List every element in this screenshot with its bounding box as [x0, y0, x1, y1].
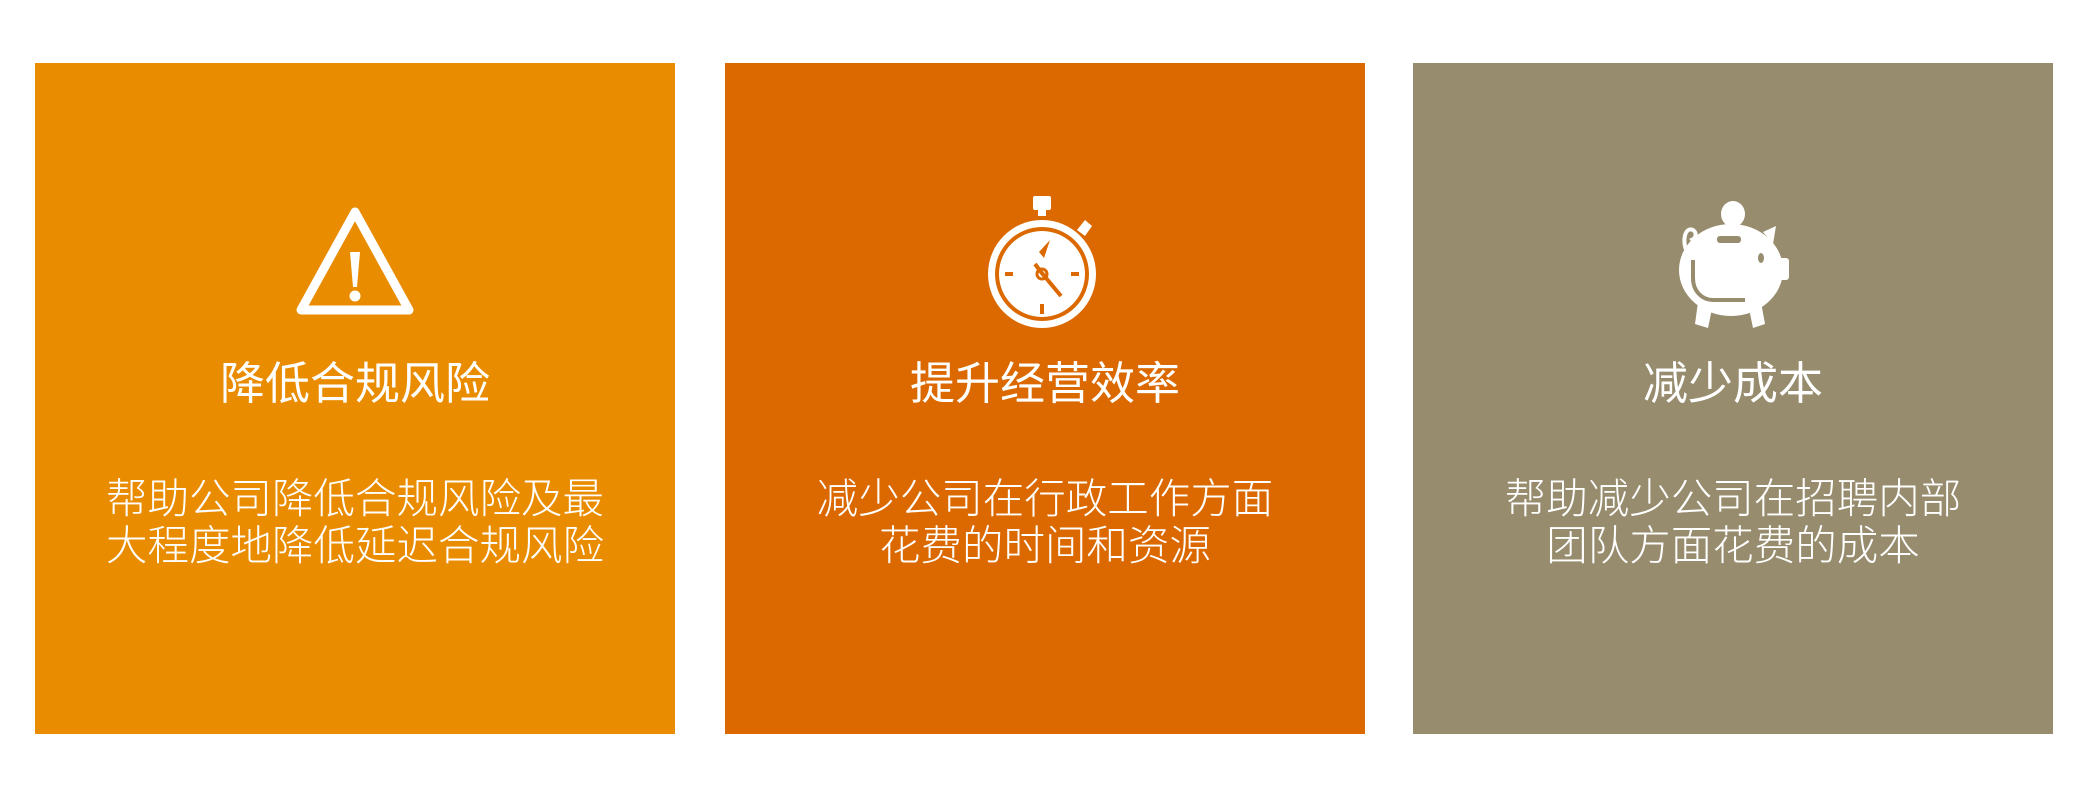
heading: 减少成本	[1643, 358, 1823, 409]
panel: improve efficiency	[725, 63, 1365, 734]
panel: reduce cost	[1413, 63, 2053, 734]
text block: 团队方面花费的成本	[1546, 522, 1920, 569]
text block: 帮助减少公司在招聘内部	[1505, 475, 1961, 522]
text block	[817, 475, 1273, 569]
text block	[106, 475, 604, 569]
heading: 提升经营效率	[910, 358, 1180, 409]
text block: 帮助公司降低合规风险及最	[106, 475, 604, 522]
icon: stopwatch	[988, 196, 1096, 328]
text block: 减少公司在行政工作方面	[817, 475, 1273, 522]
text block: 大程度地降低延迟合规风险	[106, 522, 604, 569]
icon: piggy bank	[1679, 201, 1789, 328]
text block: 花费的时间和资源	[879, 522, 1211, 569]
panel: reduce compliance risk	[35, 63, 675, 734]
text block	[1505, 475, 1961, 569]
icon: warning triangle	[296, 208, 414, 314]
heading: 降低合规风险	[220, 358, 490, 409]
